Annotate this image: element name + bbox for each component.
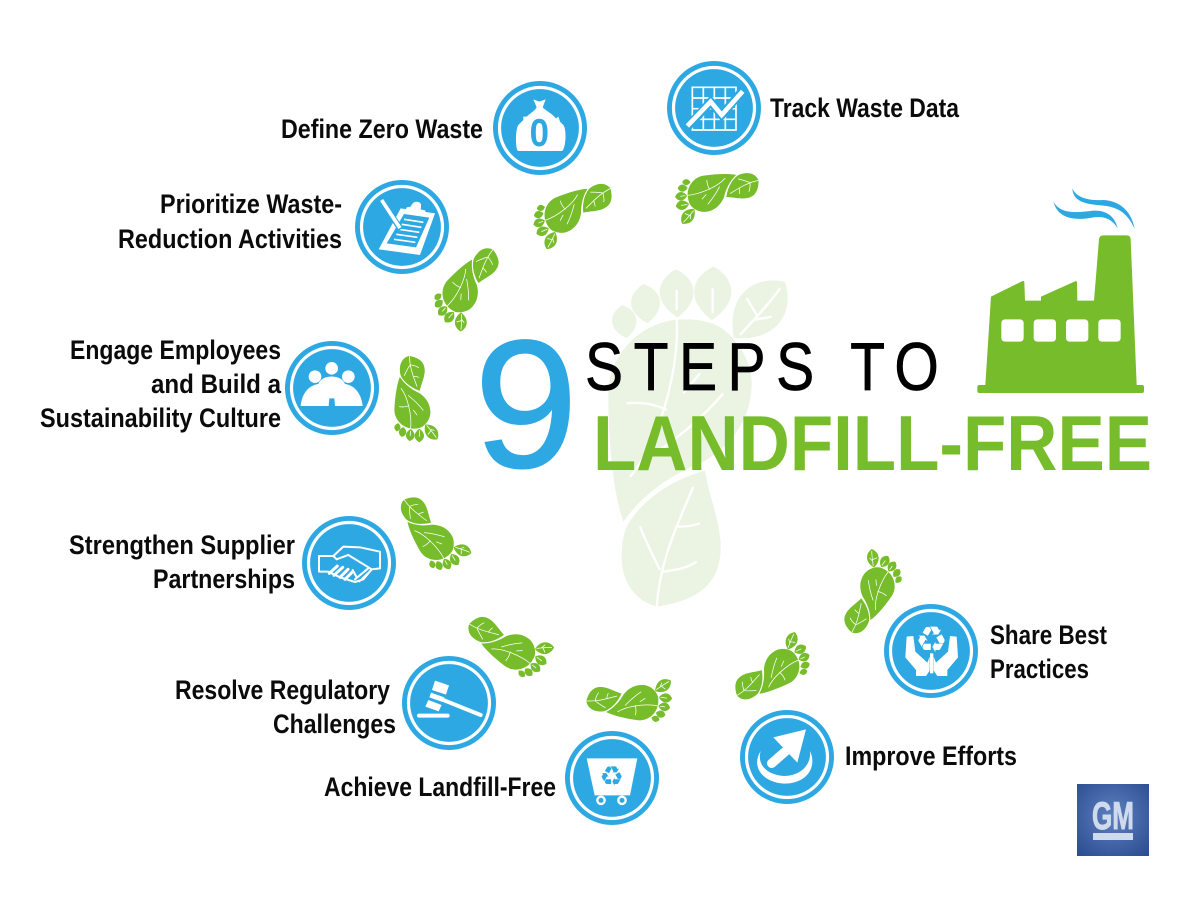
step: track waste data: Track Waste Data [770, 93, 960, 123]
step: share best practices [884, 604, 1107, 698]
title: landfill-free: LANDFILL-FREE [593, 399, 1152, 487]
step: strengthen supplier partnerships: Strengthen Supplier [69, 530, 295, 560]
step: share best practices: Share Best [990, 620, 1107, 650]
step: improve efforts [740, 710, 1017, 804]
step: resolve regulatory challenges [175, 656, 496, 750]
step: share best practices: Practices [990, 654, 1089, 684]
logo: GM [1077, 784, 1149, 856]
step: achieve landfill-free: ♻ [599, 762, 624, 793]
step: prioritize waste-reduction activities: Reduction Activities [118, 224, 342, 254]
step: define zero waste: Define Zero Waste [281, 114, 483, 144]
step: strengthen supplier partnerships: Partnerships [153, 564, 295, 594]
step: achieve landfill-free [324, 731, 659, 825]
logo: GM: GM [1092, 795, 1134, 838]
step: achieve landfill-free: Achieve Landfill-Free [324, 772, 556, 802]
icon: factory [977, 188, 1144, 393]
step: engage employees: Engage Employees [70, 335, 281, 365]
step: share best practices: ♻ [915, 620, 947, 661]
background footprint [608, 266, 802, 607]
step: engage employees [40, 335, 379, 435]
footprint trail [393, 168, 910, 725]
step: engage employees: and Build a [151, 369, 282, 399]
step: resolve regulatory challenges: Challenges [273, 709, 396, 739]
title: steps to: STEPS TO [585, 329, 949, 405]
title: number 9: 9 [474, 302, 578, 506]
step: track waste data [667, 61, 960, 155]
step: engage employees: Sustainability Culture [40, 403, 281, 433]
step: prioritize waste-reduction activities [118, 180, 449, 274]
step: strengthen supplier partnerships [69, 516, 396, 610]
step: improve efforts: Improve Efforts [845, 741, 1017, 771]
step: prioritize waste-reduction activities: Prioritize Waste- [160, 189, 342, 219]
step: define zero waste: 0 [530, 111, 549, 155]
step: define zero waste [281, 81, 587, 175]
step: resolve regulatory challenges: Resolve Regulatory [175, 675, 390, 705]
